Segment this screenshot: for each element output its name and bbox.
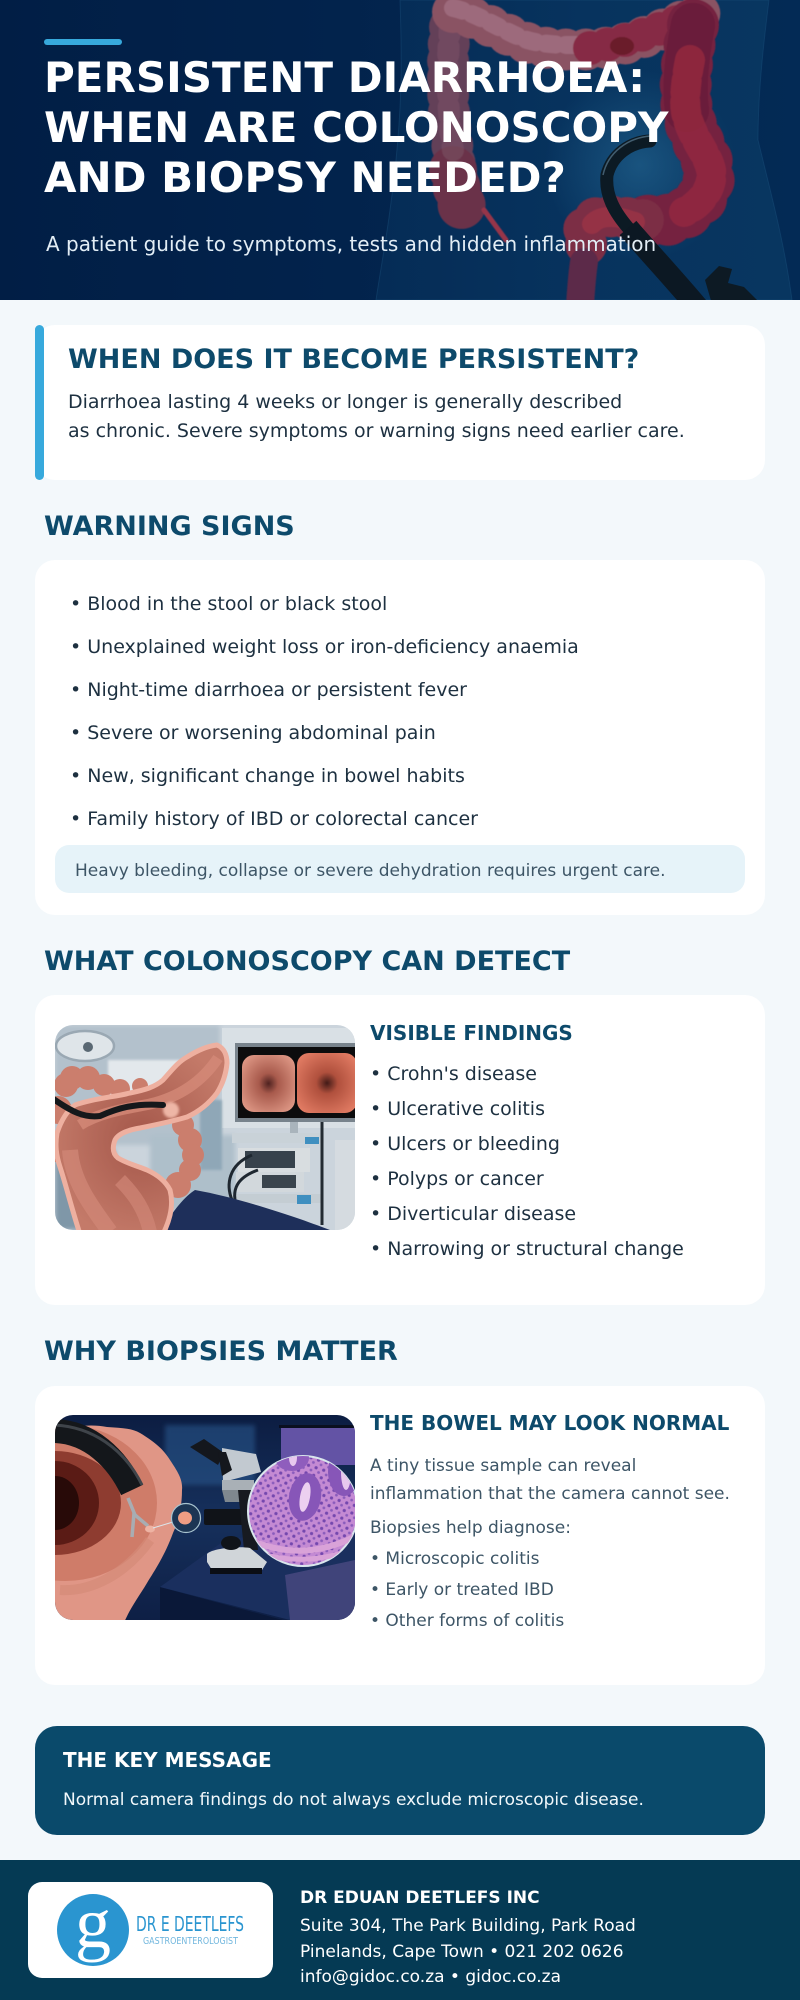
lumpy colon behind [55,1066,204,1198]
panel: biopsies [0,1386,765,1685]
urgent care note: Heavy bleeding, collapse or severe dehydration requires urgent care. [75,861,665,881]
image: colon cutaway with endoscopy room [44,1025,360,1234]
practice details: Pinelands, Cape Town • 021 202 0626 [300,1942,624,1962]
findings list: • Ulcerative colitis [370,1098,545,1120]
logo panel: GASTROENTEROLOGIST [143,1936,238,1947]
explanation: inflammation that the camera cannot see. [370,1484,730,1504]
heading: why biopsies matter: WHY BIOPSIES MATTER [44,1336,398,1367]
body text: Diarrhoea lasting 4 weeks or longer is generally described [68,391,622,413]
sigmoid colon [584,216,643,252]
blue bed [168,1190,330,1230]
panel: when does it become persistent [35,325,765,480]
panel: key message: Normal camera findings do not always exclude microscopic disease. [63,1790,644,1810]
biopsy list: • Early or treated IBD [370,1580,554,1600]
heading: WHEN DOES IT BECOME PERSISTENT? [68,344,639,375]
logo panel [28,1882,273,1978]
warning list: • New, significant change in bowel habits [70,765,465,787]
findings list: • Ulcers or bleeding [370,1133,560,1155]
explanation: A tiny tissue sample can reveal [370,1456,636,1476]
ascending colon [448,27,462,205]
findings list [370,1063,684,1260]
logo panel: g [75,1883,111,1963]
biopsy list [370,1518,571,1631]
title: WHEN ARE COLONOSCOPY [44,103,669,152]
rectum [580,262,584,305]
title [44,53,669,202]
appendix [484,210,506,240]
practice details: info@gidoc.co.za • gidoc.co.za [300,1967,561,1987]
panel: key message [35,1726,765,1835]
purple monitor [281,1427,355,1465]
heading: visible findings: VISIBLE FINDINGS [370,1021,573,1045]
footer [0,1860,800,2000]
warning list: • Blood in the stool or black stool [70,593,387,615]
practice details: Suite 304, The Park Building, Park Road [300,1916,636,1936]
header banner [0,0,800,311]
urgent care note [55,845,745,893]
tissue wall [55,1425,182,1625]
endoscope [50,1431,132,1490]
heading: what colonoscopy can detect: WHAT COLONOSCOPY CAN DETECT [44,946,571,977]
illustration: torso with colon and endoscope [376,0,792,311]
heading: warning signs: WARNING SIGNS [44,511,295,542]
logo panel: DR E DEETLEFS [136,1912,244,1936]
biopsy sample circle [153,1522,173,1528]
biopsy list: • Other forms of colitis [370,1611,564,1631]
subtitle: A patient guide to symptoms, tests and hidden inflammation [46,232,656,256]
warning list [70,593,579,830]
image: biopsy forceps, microscope and histology [55,1415,355,1620]
warning list: • Family history of IBD or colorectal cancer [70,808,478,830]
practice details: DR EDUAN DEETLEFS INC [300,1888,540,1908]
warning list: • Severe or worsening abdominal pain [70,722,436,744]
monitor [235,1043,360,1122]
forceps [128,1498,148,1537]
microscope [190,1439,267,1574]
endoscope tube [52,1098,163,1116]
title: AND BIOPSY NEEDED? [44,153,566,202]
logo mark [57,1894,129,1966]
endoscope [607,141,650,230]
accent bar [44,39,122,45]
warning list: • Unexplained weight loss or iron-deficiency anaemia [70,636,579,658]
heading: the bowel may look normal: THE BOWEL MAY LOOK NORMAL [370,1411,730,1435]
practice details [300,1888,636,1987]
biopsy list: • Microscopic colitis [370,1549,540,1569]
equipment rack [290,1122,298,1134]
descending colon [643,25,709,221]
findings list: • Diverticular disease [370,1203,576,1225]
findings list: • Polyps or cancer [370,1168,544,1190]
body text: as chronic. Severe symptoms or warning signs need earlier care. [68,420,685,442]
panel: key message: THE KEY MESSAGE [63,1748,272,1772]
accent stripe [35,325,44,480]
panel: colonoscopy [35,995,765,1305]
panel: warning signs [35,560,765,915]
findings list: • Crohn's disease [370,1063,537,1085]
findings list: • Narrowing or structural change [370,1238,684,1260]
warning list: • Night-time diarrhoea or persistent fever [70,679,467,701]
cut open colon [56,1045,227,1234]
histology circle [248,1456,358,1566]
title: PERSISTENT DIARRHOEA: [44,53,645,102]
biopsy list: Biopsies help diagnose: [370,1518,571,1538]
transverse colon [453,10,707,50]
